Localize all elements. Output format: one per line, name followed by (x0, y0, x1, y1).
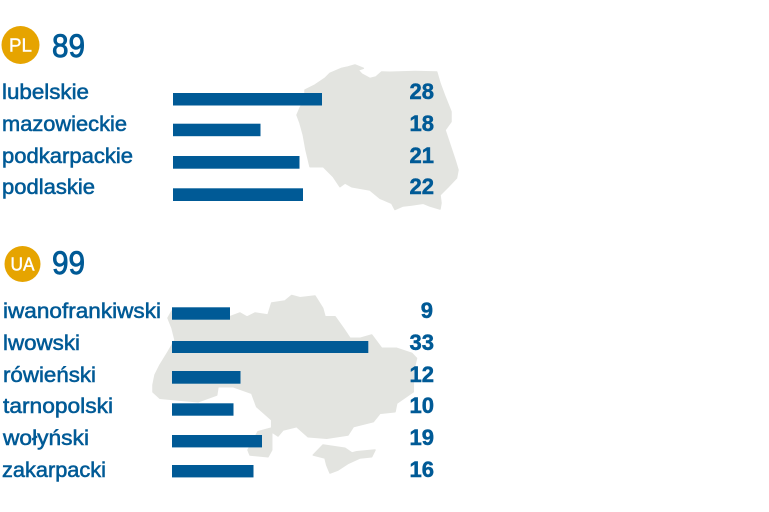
row: wolynski: wołyński (2, 427, 89, 450)
map: Ukraine (153, 296, 416, 457)
row: tarnopolski (3, 393, 434, 418)
row: mazowieckie: 18 (410, 111, 434, 136)
row: podlaskie: podlaskie (2, 176, 95, 199)
total: 89: 89 (52, 28, 85, 64)
badge: UA (4, 246, 40, 282)
row: podkarpackie: podkarpackie (2, 145, 133, 168)
badge: PL: PL (9, 36, 32, 56)
row: podlaskie (2, 174, 434, 201)
row: zakarpacki: zakarpacki (2, 459, 106, 482)
row: zakarpacki (2, 457, 434, 482)
row: podlaskie: 22 (410, 174, 434, 199)
row: tarnopolski: tarnopolski (3, 395, 113, 418)
row: rowienski: 12 (410, 362, 434, 387)
row: lwowski: 33 (410, 330, 434, 355)
badge: UA: UA (10, 254, 34, 274)
row: lwowski: lwowski (3, 332, 80, 355)
row: iwanofrankiwski: 9 (421, 298, 433, 323)
row: podkarpackie (2, 143, 434, 169)
row: iwanofrankiwski (3, 298, 433, 323)
row: lubelskie: lubelskie (2, 81, 89, 104)
panel: Poland (2, 26, 458, 210)
row: wolynski (2, 425, 434, 450)
row: rowienski (3, 362, 434, 387)
row: iwanofrankiwski: iwanofrankiwski (3, 300, 161, 323)
badge: PL (2, 26, 40, 64)
row: lwowski (3, 330, 434, 355)
row: mazowieckie (2, 111, 434, 136)
row: lubelskie (2, 79, 434, 106)
map: Poland (297, 65, 458, 210)
total: 99: 99 (52, 245, 85, 281)
row: tarnopolski: 10 (410, 393, 434, 418)
row: mazowieckie: mazowieckie (2, 113, 127, 136)
row: lubelskie: 28 (410, 79, 434, 104)
panel: Ukraine (2, 245, 434, 482)
map: Crimea (313, 445, 375, 473)
row: wolynski: 19 (410, 425, 434, 450)
row: rowienski: rówieński (3, 364, 96, 387)
row: podkarpackie: 21 (410, 143, 434, 168)
row: zakarpacki: 16 (410, 457, 434, 482)
